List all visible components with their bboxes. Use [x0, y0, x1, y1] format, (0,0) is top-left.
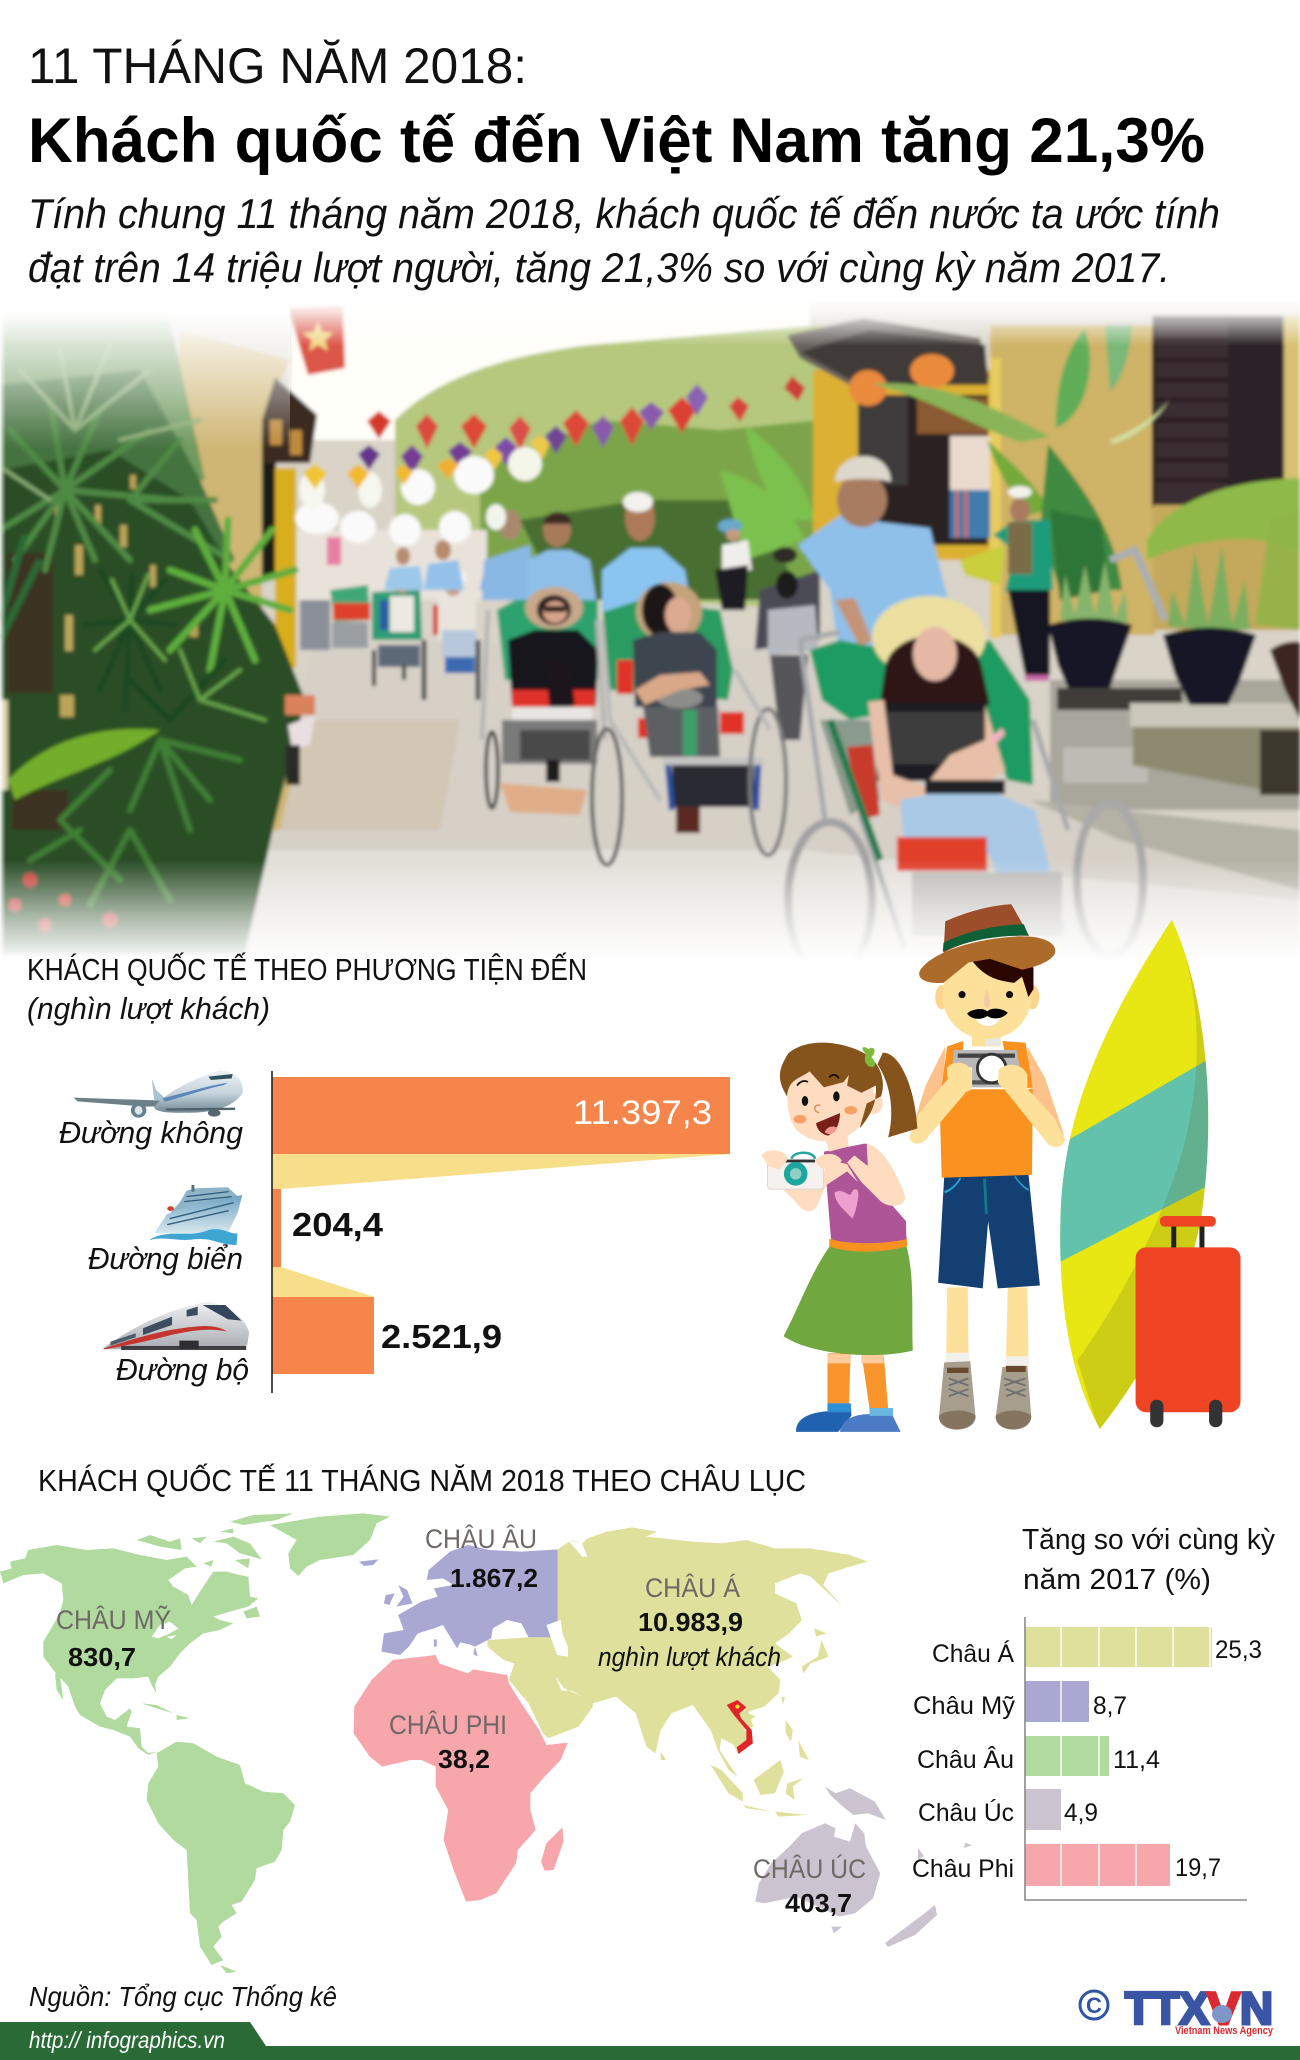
bystander woman [993, 486, 1053, 681]
cyclo C [788, 456, 1143, 978]
Vietnam highlight [727, 1700, 753, 1754]
label: sea: Đường biển [88, 1241, 243, 1276]
logo: TTXVN: TTX [1125, 1983, 1209, 2034]
icon: train [103, 1302, 249, 1350]
sky [290, 300, 810, 440]
label: Asia: CHÂU Á [645, 1572, 740, 1603]
unit note: (nghìn lượt khách) [27, 991, 270, 1026]
illustration: tourists with surfboard and suitcase [761, 904, 1241, 1436]
bar: road [272, 1297, 374, 1374]
heading: continents section: KHÁCH QUỐC TẾ 11 THÁNG NĂM 2018 THEO CHÂU LỤC [38, 1462, 806, 1498]
region: Asia [487, 1527, 868, 1817]
bar chart: arrivals by transport [59, 1071, 730, 1393]
footer band: http:// infographics.vn [29, 2027, 225, 2053]
chart title [1022, 1524, 1275, 1596]
left foliage [0, 320, 205, 480]
chart title: Tăng so với cùng kỳ [1022, 1524, 1275, 1556]
surfboard [1060, 920, 1208, 1430]
intro text block: Tính chung 11 tháng năm 2018, khách quốc tế đến nước ta ước tính [28, 190, 1220, 237]
bar: air [272, 1077, 730, 1154]
chart values: 25,3 [1215, 1636, 1262, 1664]
suitcase [1136, 1216, 1241, 1427]
bar: Asia [1025, 1627, 1212, 1667]
chart row labels: Châu Á [932, 1639, 1014, 1668]
title: date line: 11 THÁNG NĂM 2018: [28, 38, 527, 94]
connector ribbons [272, 1154, 730, 1297]
label: Oceania: CHÂU ÚC [753, 1853, 866, 1884]
icon: airplane [74, 1071, 243, 1118]
label: Asia [598, 1572, 781, 1672]
road [550, 778, 556, 779]
chart values: 8,7 [1093, 1692, 1127, 1720]
left wall [177, 332, 292, 832]
chart values: 11,4 [1113, 1746, 1160, 1774]
label: Asia: 10.983,9 [638, 1607, 743, 1637]
boy with hat and camera [910, 904, 1065, 1430]
bar: Americas [1025, 1681, 1089, 1722]
value: road: 2.521,9 [381, 1318, 502, 1355]
icon: cruise ship [150, 1185, 242, 1245]
chart values: 4,9 [1064, 1799, 1098, 1827]
steps [1050, 680, 1300, 810]
value: sea: 204,4 [292, 1206, 384, 1243]
chart row labels: Châu Phi [912, 1855, 1014, 1883]
region: Americas [0, 1513, 390, 1973]
region: Oceania [755, 1787, 972, 1947]
label: Oceania [753, 1853, 866, 1918]
logo: TTXVN [1080, 1983, 1274, 2037]
distant street [297, 530, 487, 600]
region: Africa [354, 1655, 568, 1902]
value: air: 11.397,3 [573, 1094, 712, 1132]
photo fades [0, 298, 1300, 962]
label: Americas: CHÂU MỸ [56, 1604, 171, 1635]
footer band [0, 2022, 1300, 2060]
chart title: năm 2017 (%) [1023, 1564, 1211, 1596]
logo: TTXVN: V [1207, 1983, 1240, 2034]
bar: Europe [1025, 1736, 1109, 1776]
label: Americas: 830,7 [68, 1642, 136, 1672]
label: Africa [389, 1709, 507, 1774]
bar: Africa [1025, 1844, 1170, 1886]
intro text block: đạt trên 14 triệu lượt người, tăng 21,3% so với cùng kỳ năm 2017. [28, 244, 1170, 291]
girl with camera [761, 1043, 917, 1432]
far drivers [382, 508, 524, 594]
logo: TTXVN: Vietnam News Agency [1175, 2025, 1274, 2037]
bar: sea [272, 1189, 281, 1267]
label: Africa: 38,2 [438, 1744, 490, 1774]
label: Europe: CHÂU ÂU [425, 1523, 537, 1554]
bar: Oceania [1025, 1789, 1061, 1830]
title: main headline: Khách quốc tế đến Việt Nam tăng 21,3% [28, 106, 1205, 176]
chart row labels [912, 1639, 1015, 1883]
chart values: 19,7 [1175, 1854, 1221, 1882]
flag [288, 305, 345, 375]
photo: cyclo tourists in Hoi An street [0, 298, 1300, 978]
far cyclos [300, 571, 478, 700]
right plants [872, 383, 1050, 442]
source note: Nguồn: Tổng cục Thống kê [29, 1981, 337, 2012]
region: Europe [359, 1545, 558, 1657]
chart values [1064, 1636, 1262, 1882]
label: air: Đường không [59, 1115, 243, 1150]
cyclo B [592, 492, 786, 865]
label: Europe [425, 1523, 538, 1593]
label: Africa: CHÂU PHI [389, 1709, 507, 1740]
background trees [395, 325, 820, 610]
world map [0, 1513, 972, 1973]
lanterns [295, 376, 805, 546]
logo: TTXVN: C [1086, 1993, 1102, 2018]
chart row labels: Châu Úc [918, 1798, 1014, 1827]
right building [813, 370, 993, 560]
chart row labels: Châu Âu [917, 1745, 1014, 1774]
intro text block [28, 190, 1220, 291]
map labels [56, 1523, 866, 1918]
bystanders middle [715, 519, 820, 740]
label: Oceania: 403,7 [785, 1888, 852, 1918]
logo: TTXVN: N [1240, 1983, 1273, 2034]
label: Asia: nghìn lượt khách [598, 1642, 781, 1672]
heading: transport section: KHÁCH QUỐC TẾ THEO PHƯƠNG TIỆN ĐẾN [27, 951, 587, 987]
label: Europe: 1.867,2 [450, 1563, 538, 1593]
bar chart: growth by continent [912, 1524, 1275, 1900]
chart row labels: Châu Mỹ [913, 1692, 1015, 1720]
label: road: Đường bộ [116, 1352, 249, 1387]
pots [1048, 618, 1132, 688]
label: Americas [56, 1604, 171, 1672]
cyclo A [482, 512, 605, 808]
